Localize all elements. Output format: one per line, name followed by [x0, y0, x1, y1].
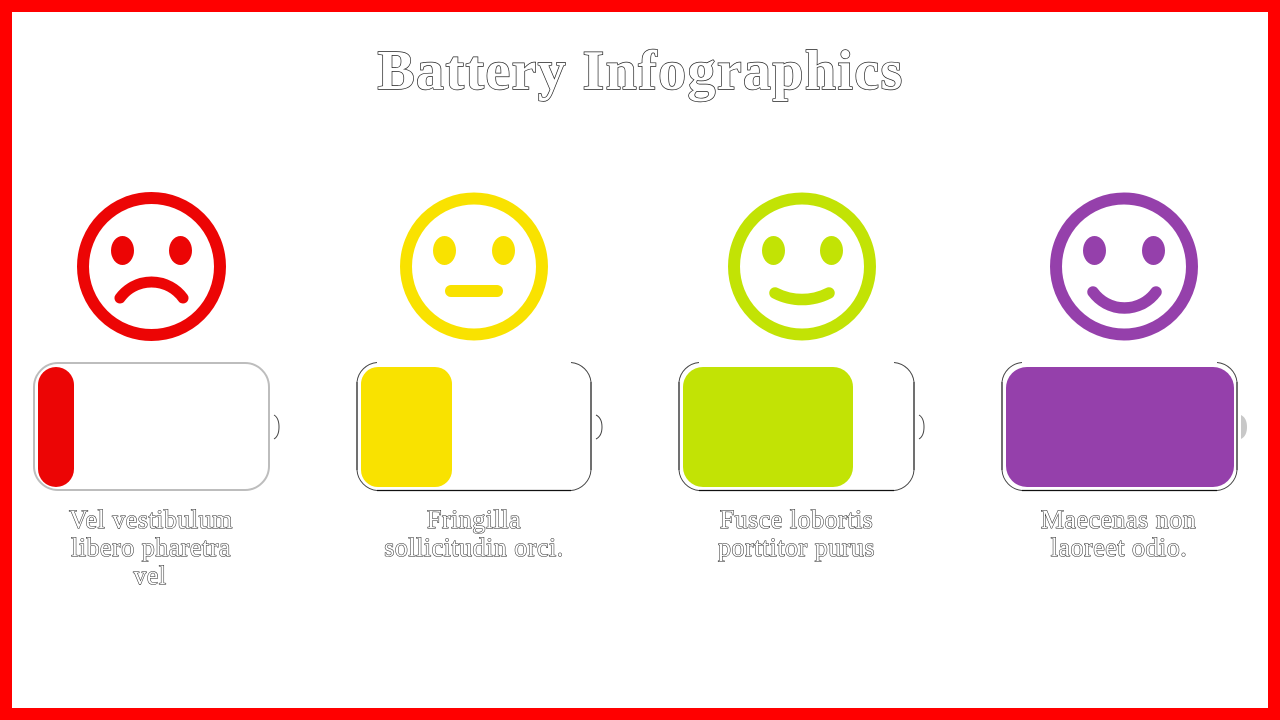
battery: low charge [34, 363, 279, 490]
label: medium battery [384, 505, 564, 562]
battery: medium charge [357, 362, 602, 490]
label: full battery: Maecenas non [1041, 505, 1196, 534]
title: Battery Infographics [377, 40, 904, 102]
icon: sad face [83, 198, 220, 335]
icon: happy face [1056, 198, 1192, 334]
label: high battery: Fusce lobortis [720, 505, 873, 534]
battery: high charge [679, 362, 924, 490]
label: low battery: vel [133, 561, 167, 590]
label: full battery [1041, 505, 1196, 562]
label: full battery: laoreet odio. [1051, 533, 1187, 562]
label: low battery [69, 505, 233, 590]
label: low battery: Vel vestibulum [69, 505, 233, 534]
column: high battery [679, 198, 924, 562]
column: full battery [1002, 198, 1247, 562]
column: medium battery [357, 198, 602, 562]
icon: neutral face [406, 198, 542, 334]
icon: slight smile face [734, 198, 870, 334]
label: medium battery: Fringilla [427, 505, 521, 534]
label: high battery: porttitor purus [718, 533, 875, 562]
label: high battery [718, 505, 875, 562]
column: low battery [34, 198, 279, 590]
battery: full charge [1002, 362, 1247, 490]
label: low battery: libero pharetra [71, 533, 231, 562]
label: medium battery: sollicitudin orci. [384, 533, 564, 562]
